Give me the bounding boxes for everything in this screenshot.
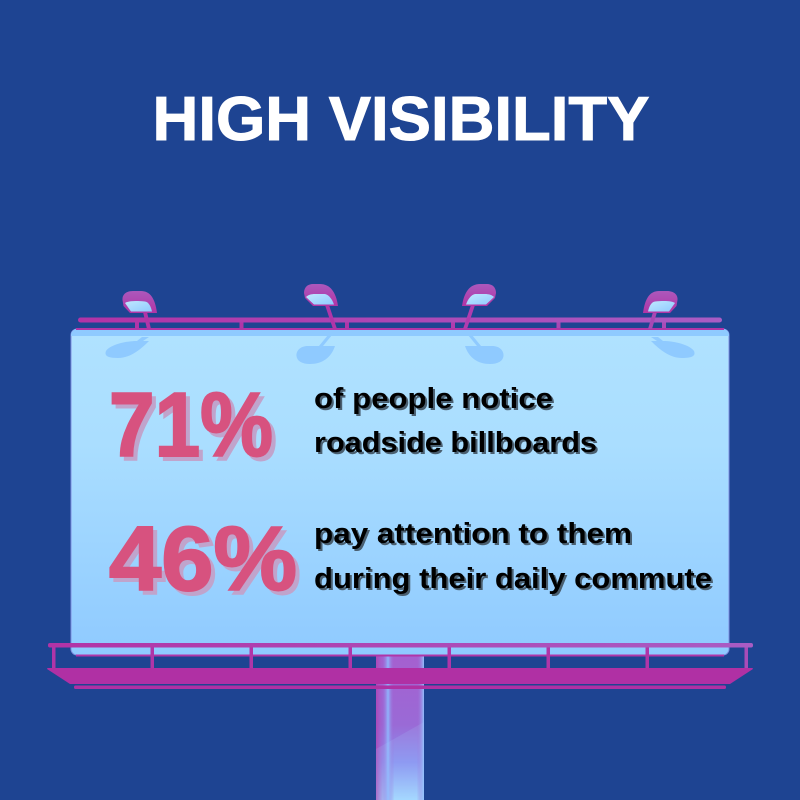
statistic: 71%: 71% bbox=[109, 375, 273, 476]
statistic: 46%: 46% bbox=[113, 513, 301, 614]
statistic text: 71%: roadside billboards bbox=[314, 427, 597, 459]
billboard platform bbox=[47, 668, 753, 689]
title: HIGH VISIBILITY bbox=[152, 85, 650, 154]
statistic text: 71%: roadside billboards bbox=[316, 429, 599, 461]
lamp 3 bbox=[462, 284, 504, 364]
statistic text: 46%: during their daily commute bbox=[314, 563, 712, 595]
billboard panel bbox=[71, 328, 729, 655]
statistic text: 46%: during their daily commute bbox=[316, 565, 714, 597]
statistic text: 71%: of people notice bbox=[316, 385, 555, 417]
statistic text: 46%: pay attention to them bbox=[316, 520, 634, 552]
statistic text: 71% bbox=[314, 383, 599, 461]
lamp 2 bbox=[296, 284, 338, 364]
statistic text: 46%: pay attention to them bbox=[314, 518, 632, 550]
bottom railing bbox=[48, 643, 753, 669]
lamp 4 bbox=[643, 291, 694, 358]
statistic text: 46% bbox=[314, 518, 714, 597]
statistic: 46%: 46% bbox=[109, 509, 297, 610]
top rail bbox=[78, 318, 722, 330]
statistic text: 71%: of people notice bbox=[314, 383, 553, 415]
statistic: 71%: 71% bbox=[113, 379, 277, 480]
billboard pole bbox=[376, 650, 424, 800]
lamp 1 bbox=[106, 291, 157, 358]
